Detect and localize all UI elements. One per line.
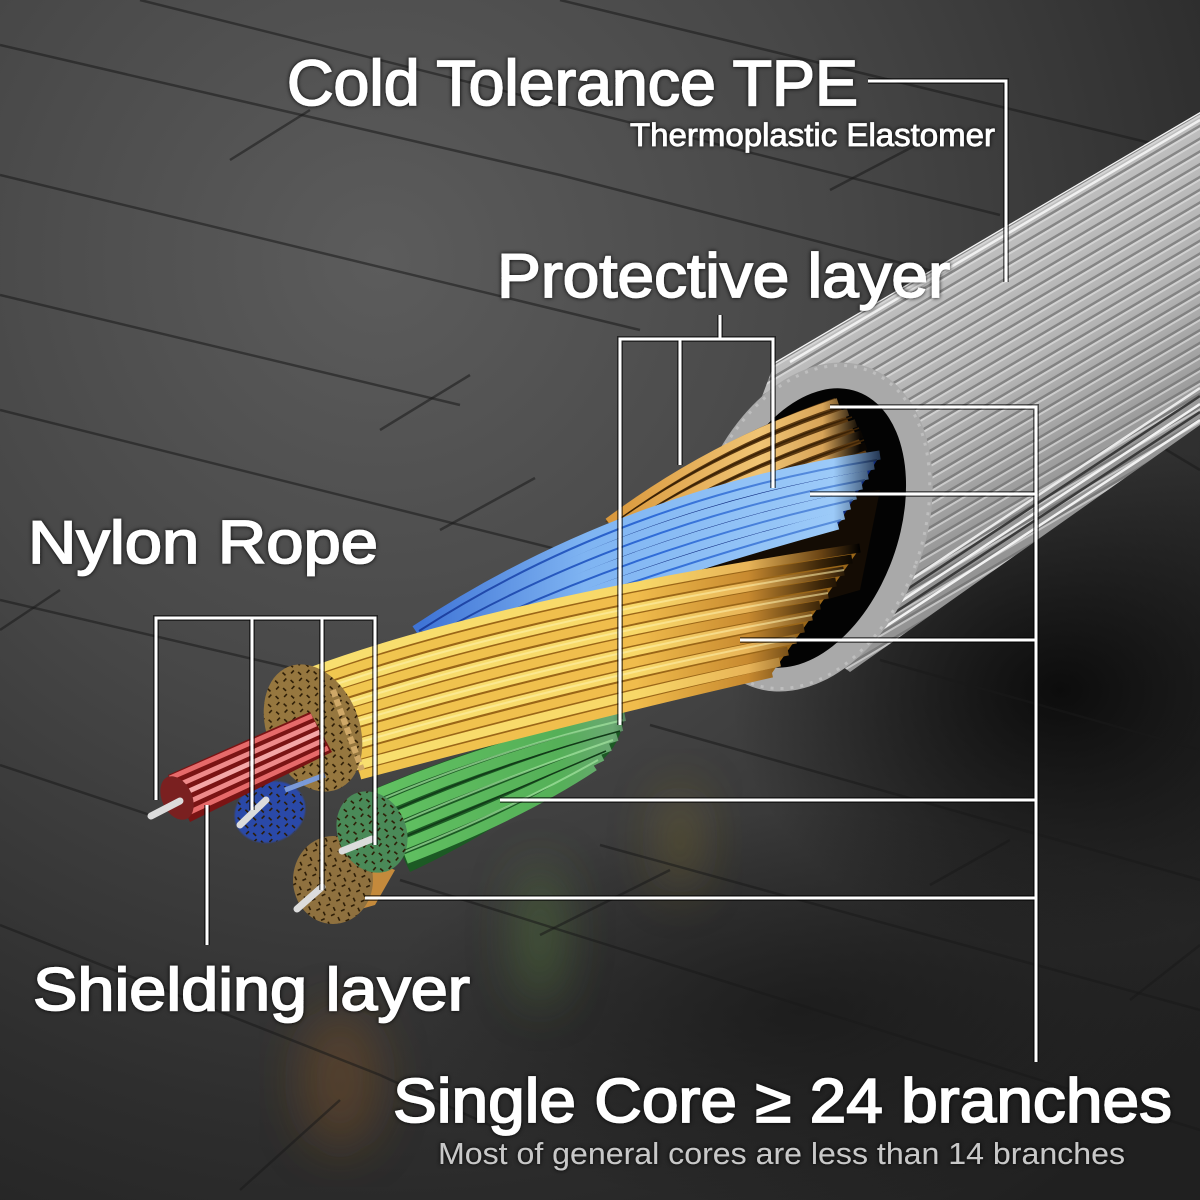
blue core [415,455,880,646]
nylon rope ends [151,800,372,909]
note: general core comparison: Most of general cores are less than 14 branches [438,1136,1125,1171]
label: Protective layer: Protective layer [497,242,950,311]
red core [154,712,332,825]
subheading: Thermoplastic Elastomer: Thermoplastic Elastomer [630,117,995,153]
main yellow core [246,548,860,806]
top orange core [605,398,868,530]
label: Shielding layer: Shielding layer [33,956,470,1023]
label: Single Core 24 branches: Single Core ≥ 24 branches [393,1067,1172,1136]
jacket end ring [644,328,976,726]
label: Nylon Rope: Nylon Rope [28,509,378,576]
lower orange core end [293,836,395,924]
green core [323,712,625,884]
callout lines [156,81,1036,1062]
cable jacket: cold tolerance TPE [722,112,1200,692]
heading: Cold Tolerance TPE: Cold Tolerance TPE [287,47,858,119]
dark gap between strands [600,490,880,650]
small blue core [226,771,325,853]
